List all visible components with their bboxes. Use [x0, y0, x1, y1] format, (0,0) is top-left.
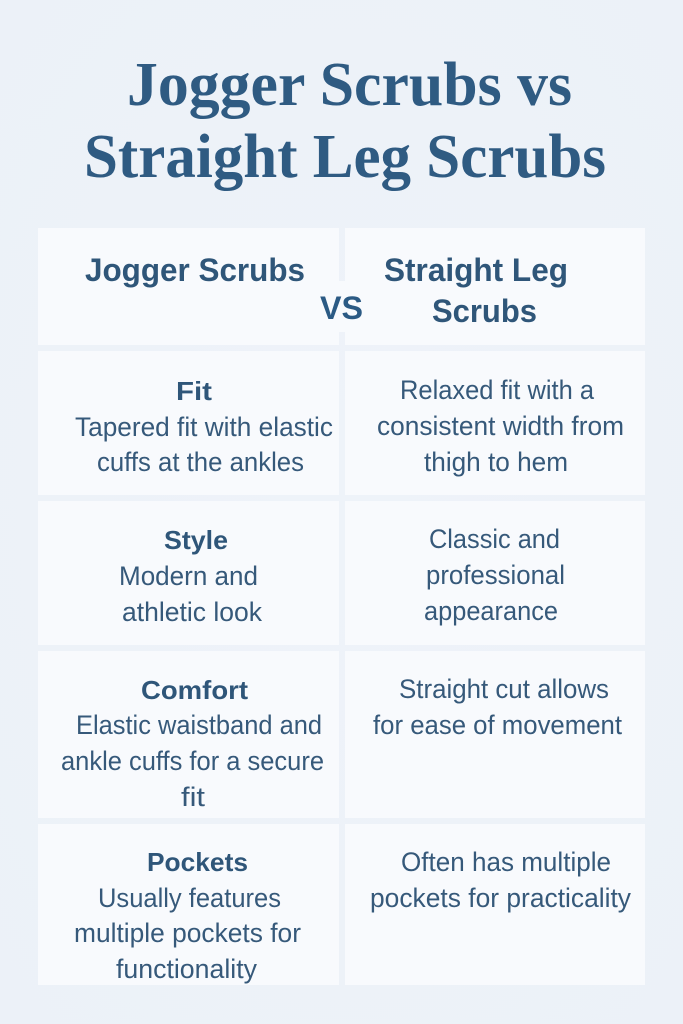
panel: fit straight leg: Relaxed fit with a — [400, 375, 595, 405]
panel: style jogger: Style — [164, 525, 228, 555]
panel: jogger header: Jogger Scrubs — [85, 252, 305, 288]
panel: comfort jogger: Elastic waistband and — [76, 710, 322, 740]
panel: pockets jogger: multiple pockets for — [74, 918, 301, 948]
panel: straight leg header — [345, 228, 645, 345]
panel: straight leg header: Scrubs — [432, 293, 537, 329]
title: Jogger Scrubs vs — [127, 51, 572, 119]
vs badge: VS — [320, 290, 363, 326]
panel: comfort straight leg: Straight cut allows — [399, 674, 609, 704]
panel: jogger header — [38, 228, 339, 345]
panel: straight leg header: Straight Leg — [384, 252, 568, 288]
panel: style jogger: athletic look — [122, 597, 262, 627]
panel: comfort jogger: ankle cuffs for a secure — [61, 746, 324, 776]
panel: comfort jogger: Comfort — [141, 675, 248, 705]
panel: fit jogger: cuffs at the ankles — [97, 447, 304, 477]
panel: fit jogger: Tapered fit with elastic — [75, 412, 333, 442]
panel: header row — [38, 228, 645, 345]
panel: comfort jogger — [38, 651, 339, 818]
panel: pockets jogger: Pockets — [147, 847, 248, 877]
panel: style straight leg: professional — [426, 560, 565, 590]
panel: style straight leg: appearance — [424, 596, 558, 626]
title — [84, 51, 606, 191]
panel: fit jogger — [38, 351, 339, 495]
panel: pockets straight leg: pockets for practicality — [370, 883, 631, 913]
panel: style jogger: Modern and — [119, 561, 258, 591]
panel: pockets jogger: Usually features — [98, 883, 281, 913]
panel: pockets jogger — [38, 824, 339, 985]
panel: pockets straight leg: Often has multiple — [401, 847, 611, 877]
panel: style straight leg — [345, 501, 645, 645]
panel: comfort jogger: fit — [181, 782, 206, 812]
panel: fit straight leg: thigh to hem — [424, 447, 568, 477]
panel: pockets jogger: functionality — [116, 954, 257, 984]
panel: fit straight leg: consistent width from — [377, 411, 624, 441]
panel: style straight leg: Classic and — [429, 524, 560, 554]
panel: comfort straight leg: for ease of movement — [373, 710, 622, 740]
panel: pockets straight leg — [345, 824, 645, 985]
title: Straight Leg Scrubs — [84, 123, 606, 191]
panel: comfort straight leg — [345, 651, 645, 818]
panel: fit straight leg — [345, 351, 645, 495]
panel: fit jogger: Fit — [176, 376, 212, 406]
panel: style jogger — [38, 501, 339, 645]
